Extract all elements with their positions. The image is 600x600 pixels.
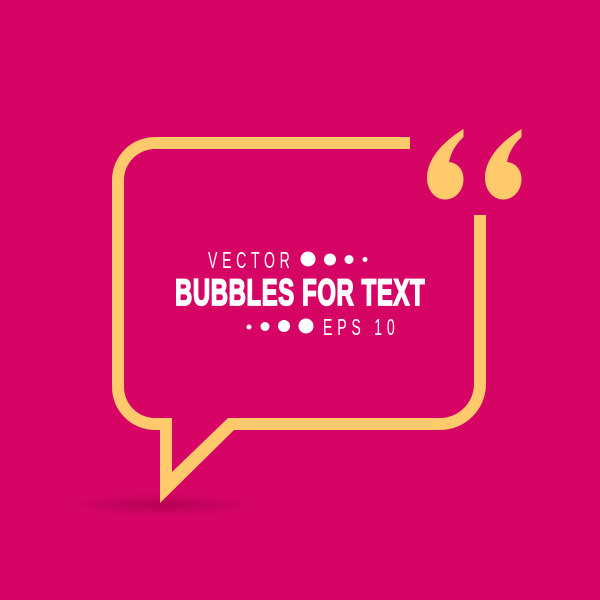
text: VECTOR: VECTOR	[208, 247, 295, 274]
text: EPS 10: EPS 10	[323, 314, 400, 341]
speech bubble outline	[112, 137, 486, 503]
icon: quotation marks	[427, 129, 522, 200]
dots before EPS 10	[246, 318, 314, 334]
dots after VECTOR	[300, 252, 368, 266]
heading: BUBBLES FOR TEXT: BUBBLES FOR TEXT	[175, 272, 425, 313]
shadow under speech bubble	[66, 495, 258, 515]
